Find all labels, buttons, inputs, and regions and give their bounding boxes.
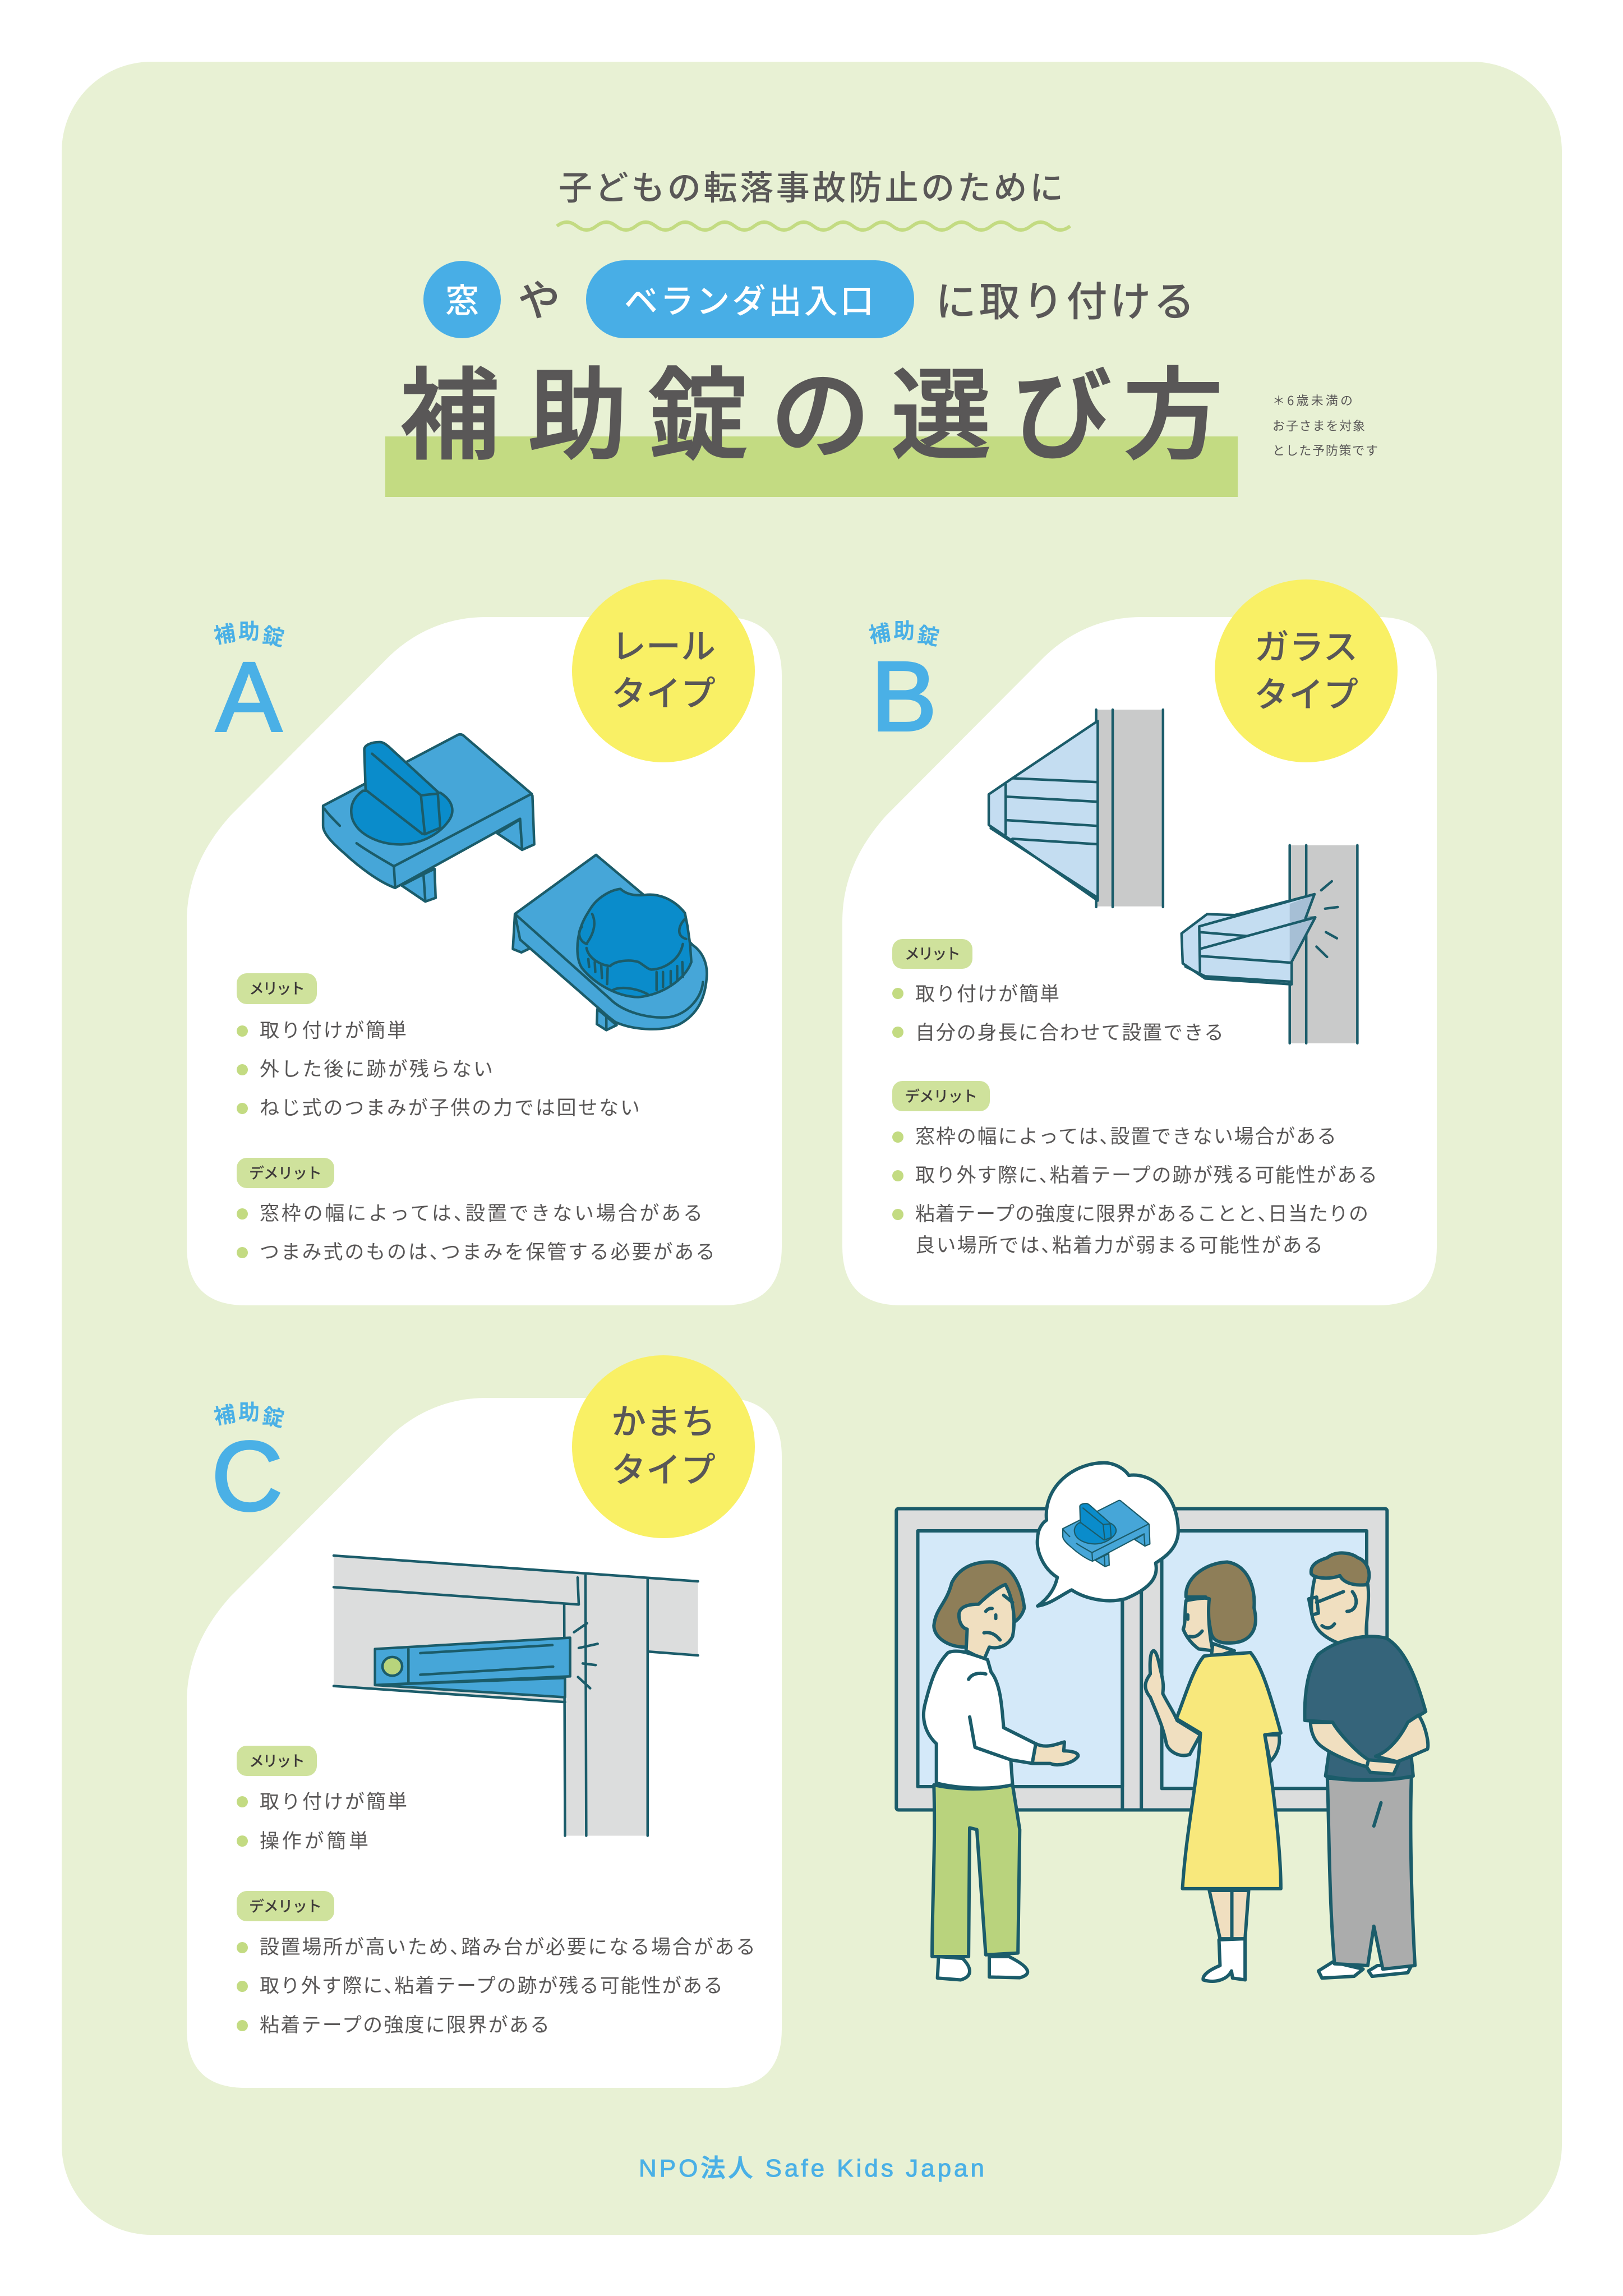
label: hojo-jo (211, 1395, 287, 1433)
person: woman in white shirt (924, 1562, 1078, 1980)
type badge (572, 1355, 755, 1538)
label: hojo-jo: 錠 (260, 1398, 287, 1433)
window (896, 1508, 1387, 1810)
merit list: ねじ式のつまみが子供の力では回せない (260, 1092, 640, 1121)
card C (187, 1398, 782, 2088)
merit list (237, 1786, 407, 1854)
demerit tag: デメリット (905, 1084, 978, 1106)
panel: lock C sash type (187, 1355, 782, 2088)
badge: window: 窓 (445, 274, 479, 323)
type badge (1215, 579, 1398, 762)
type badge: タイプ (611, 665, 716, 716)
badge: veranda: ベランダ出入口 (624, 274, 874, 323)
merit list: 取り付けが簡単 (260, 1015, 407, 1043)
demerit list (237, 1931, 755, 2038)
demerit tag (892, 1081, 990, 1111)
merit tag (237, 1746, 317, 1776)
merit list: 取り付けが簡単 (915, 978, 1059, 1007)
merit tag: メリット (249, 977, 305, 999)
illustration: glass locks (989, 710, 1357, 1043)
illustration: sash lock (334, 1556, 698, 1835)
merit list: 操作が簡単 (260, 1825, 368, 1854)
title band (385, 436, 1238, 497)
demerit list: 取り外す際に、粘着テープの跡が残る可能性がある (260, 1970, 723, 1999)
card A (187, 617, 782, 1305)
merit tag: メリット (905, 942, 961, 964)
demerit list (237, 1198, 715, 1265)
merit tag (892, 939, 972, 969)
label: hojo-jo (866, 614, 942, 651)
demerit tag (237, 1891, 334, 1921)
label: hojo-jo: 補 (866, 615, 893, 649)
label: hojo-jo: 助 (893, 614, 915, 645)
demerit tag: デメリット (249, 1894, 322, 1916)
demerit tag: デメリット (249, 1161, 322, 1183)
merit list: 外した後に跡が残らない (260, 1053, 493, 1082)
demerit list: 粘着テープの強度に限界があることと、日当たりの (915, 1198, 1368, 1227)
panel: lock A rail type (187, 579, 782, 1305)
header (385, 161, 1378, 497)
label: hojo-jo (211, 614, 287, 652)
demerit tag (237, 1158, 334, 1188)
merit list (892, 978, 1224, 1046)
letter B: B (871, 642, 937, 752)
demerit list: 窓枠の幅によっては、設置できない場合がある (915, 1121, 1336, 1149)
type badge: ガラス (1255, 619, 1358, 669)
demerit list: 粘着テープの強度に限界がある (260, 2009, 550, 2038)
main title: 補助錠の選び方 (400, 335, 1223, 480)
card B (842, 617, 1437, 1305)
footnote: お子さまを対象 (1272, 416, 1365, 434)
demerit list: 良い場所では、粘着力が弱まる可能性がある (915, 1230, 1323, 1258)
wavy underline (557, 222, 1070, 230)
label: hojo-jo: 錠 (260, 618, 287, 652)
merit tag (237, 973, 317, 1004)
demerit list: つまみ式のものは、つまみを保管する必要がある (260, 1236, 715, 1265)
illustration: rail locks (323, 734, 707, 1030)
demerit list (892, 1121, 1377, 1258)
type badge (572, 579, 755, 762)
merit list (237, 1015, 640, 1121)
demerit list: 設置場所が高いため、踏み台が必要になる場合がある (260, 1931, 755, 1960)
merit tag: メリット (249, 1749, 305, 1771)
person: woman in yellow dress (1145, 1562, 1281, 1981)
merit list: 自分の身長に合わせて設置できる (915, 1017, 1224, 1046)
letter C: C (211, 1421, 283, 1531)
type badge: かまち (611, 1393, 716, 1444)
badge: veranda (586, 260, 914, 338)
letter A: A (216, 642, 282, 752)
merit list: 取り付けが簡単 (260, 1786, 407, 1815)
illustration: family at window (896, 1463, 1428, 1981)
badge: window (423, 261, 501, 338)
type badge: タイプ (1254, 666, 1358, 717)
label: hojo-jo: 錠 (915, 617, 942, 651)
person: man with glasses (1304, 1553, 1428, 1978)
demerit list: 窓枠の幅によっては、設置できない場合がある (260, 1198, 703, 1226)
label: hojo-jo: 補 (211, 615, 238, 650)
label: hojo-jo: 補 (211, 1396, 238, 1430)
footnote: ＊6歳未満の (1272, 391, 1353, 409)
demerit list: 取り外す際に、粘着テープの跡が残る可能性がある (915, 1159, 1377, 1188)
speech bubble (1038, 1463, 1178, 1606)
footer credit: NPO法人 Safe Kids Japan (639, 2155, 984, 2182)
label: hojo-jo: 助 (238, 1395, 260, 1426)
panel: lock B glass type (842, 579, 1437, 1305)
footnote (1272, 391, 1378, 459)
type badge: タイプ (611, 1442, 716, 1492)
type badge: レール (611, 618, 716, 669)
subtitle: 子どもの転落事故防止のために (559, 161, 1063, 210)
line: attach: に取り付ける (935, 269, 1195, 328)
footnote: とした予防策です (1272, 441, 1378, 459)
label: hojo-jo: 助 (238, 614, 260, 645)
connector や: や (518, 266, 560, 328)
